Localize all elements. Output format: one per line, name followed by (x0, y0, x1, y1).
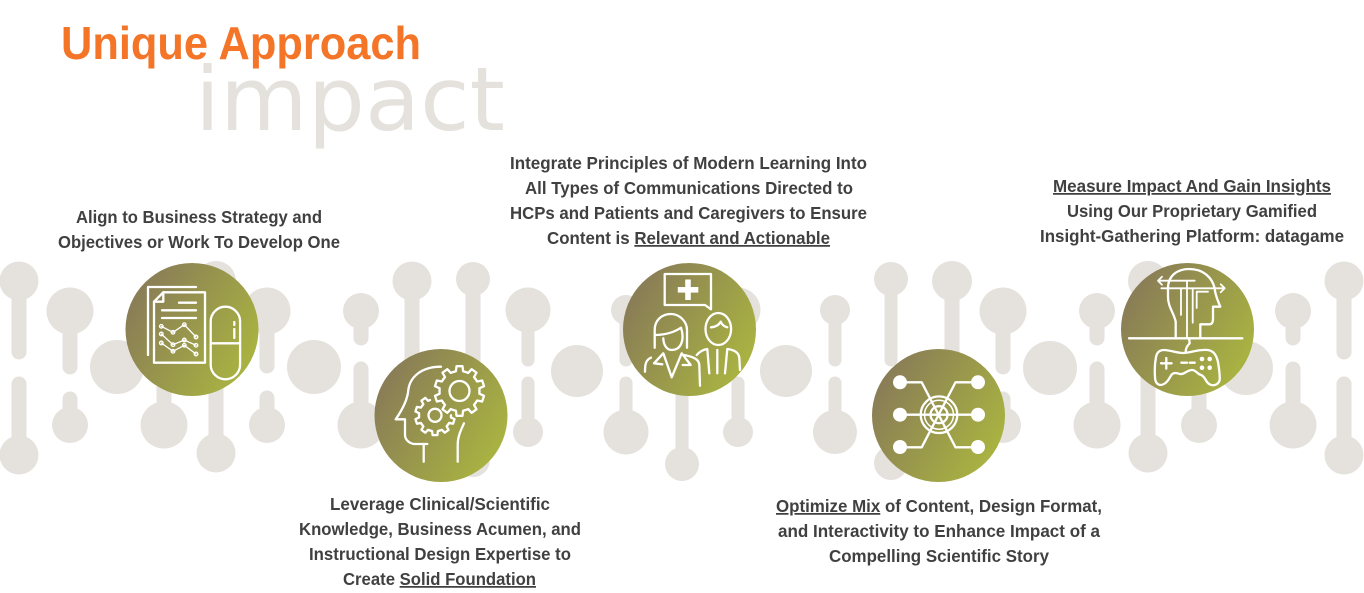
text block: step 5: Using Our Proprietary Gamified (1067, 201, 1317, 221)
text block: step 1: Align to Business Strategy and (76, 207, 322, 227)
text block: step 2: Knowledge, Business Acumen, and (299, 519, 581, 539)
text block: step 3 (510, 153, 867, 248)
icon: head with gears (374, 349, 508, 482)
text block: step 3: All Types of Communications Directed to (525, 178, 853, 198)
icon: head and game controller (1121, 263, 1254, 396)
text block: step 4: Optimize Mix of Content, Design Format, (776, 496, 1102, 516)
text block: step 5: Measure Impact And Gain Insights (1053, 176, 1331, 196)
text block: step 1 (58, 207, 340, 252)
watermark word: impact: impact (195, 48, 505, 151)
background molecule pattern (0, 261, 1364, 481)
title: Unique Approach (61, 17, 421, 69)
text block: step 4: Compelling Scientific Story (829, 546, 1049, 566)
icon: doctors with speech bubble (623, 263, 756, 396)
icon: network hub (872, 349, 1005, 482)
text block: step 4 (776, 496, 1102, 566)
text block: step 2: Instructional Design Expertise to (309, 544, 571, 564)
text block: step 2 (299, 494, 581, 589)
text block: step 2: Leverage Clinical/Scientific (330, 494, 550, 514)
icon: documents and capsule (126, 263, 258, 396)
text block: step 4: and Interactivity to Enhance Impact of a (778, 521, 1100, 541)
text block: step 3: HCPs and Patients and Caregivers to Ensure (510, 203, 867, 223)
text block: step 5: Insight-Gathering Platform: datagame (1040, 226, 1344, 246)
text block: step 3: Integrate Principles of Modern Learning Into (510, 153, 867, 173)
text block: step 5 (1040, 176, 1344, 246)
text block: step 2: Create Solid Foundation (343, 569, 536, 589)
text block: step 3: Content is Relevant and Actionable (547, 228, 830, 248)
text block: step 1: Objectives or Work To Develop One (58, 232, 340, 252)
